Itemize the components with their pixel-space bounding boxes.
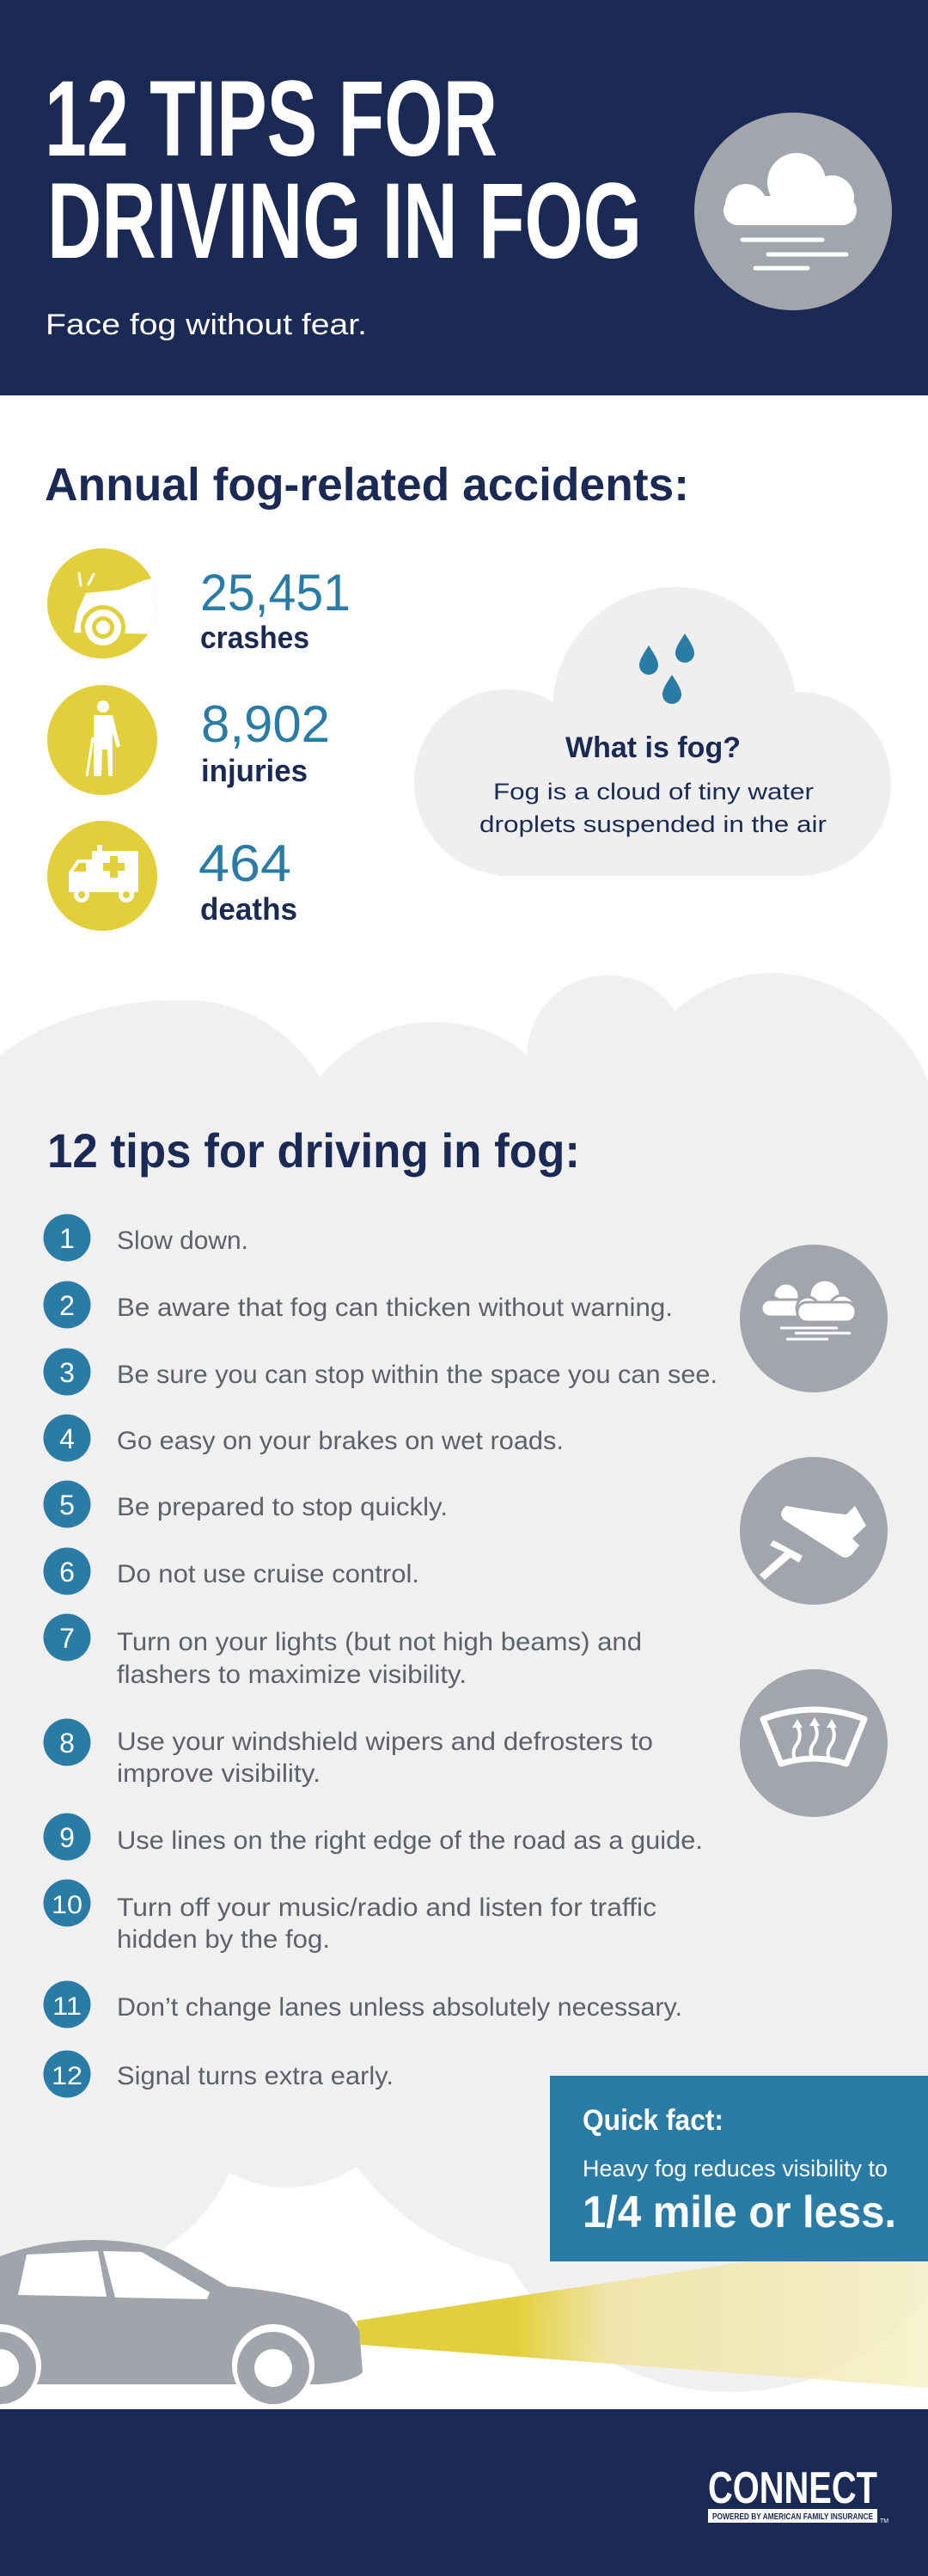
tip 10: 10	[52, 1891, 82, 1919]
stat: injuries: 8,902	[201, 695, 330, 753]
title: 12 TIPS FOR	[45, 59, 498, 179]
callout: quick fact	[550, 2076, 928, 2261]
tip 12: Signal turns extra early.	[117, 2062, 394, 2090]
tip 9: Use lines on the right edge of the road as a guide.	[117, 1826, 703, 1855]
icon: clouds and fog	[740, 1245, 888, 1392]
heading: annual accidents: Annual fog-related accidents:	[45, 459, 689, 511]
stat: deaths: 464	[198, 835, 291, 892]
logo: connect: TM	[880, 2518, 888, 2524]
tip 6: 6	[59, 1557, 75, 1588]
logo: connect: POWERED BY AMERICAN FAMILY INSURANCE	[712, 2512, 873, 2522]
stat: deaths	[47, 821, 297, 931]
tip 2: 2	[59, 1290, 75, 1321]
stat: injuries	[47, 685, 330, 795]
tip 4: 4	[59, 1423, 75, 1454]
tip 1	[43, 1214, 248, 1262]
tip 6	[43, 1547, 419, 1595]
tip 5	[43, 1480, 448, 1528]
callout: quick fact: Heavy fog reduces visibility to	[583, 2156, 888, 2181]
subtitle: Face fog without fear.	[46, 309, 367, 341]
scene: ground fog	[0, 1771, 928, 2409]
tip 10: Turn off your music/radio and listen for traffic	[117, 1894, 656, 1922]
stat: injuries: injuries	[201, 753, 308, 788]
title: DRIVING IN FOG	[47, 162, 642, 281]
tip 11: 11	[52, 1992, 82, 2021]
tip 9	[43, 1814, 703, 1860]
tips list	[43, 1214, 717, 2097]
tip 7: Turn on your lights (but not high beams) and	[117, 1628, 642, 1656]
tip 7: flashers to maximize visibility.	[117, 1661, 467, 1689]
tip 3: 3	[59, 1357, 75, 1388]
panel: what is fog cloud: droplets suspended in the air	[479, 811, 827, 837]
tip 7	[43, 1614, 642, 1689]
tip 5: Be prepared to stop quickly.	[117, 1493, 448, 1521]
tip 10: hidden by the fog.	[117, 1925, 330, 1954]
icon: ambulance	[47, 821, 157, 931]
tip 11	[43, 1980, 682, 2028]
stat: crashes: crashes	[200, 620, 309, 655]
tip 8: improve visibility.	[117, 1759, 321, 1788]
tip 3: Be sure you can stop within the space you can see.	[117, 1361, 717, 1389]
icon: water drops	[639, 633, 694, 704]
footer	[0, 2409, 928, 2576]
panel: fog background	[0, 973, 928, 2409]
icon: fog cloud	[694, 113, 892, 310]
title	[45, 59, 642, 281]
panel: what is fog cloud: Fog is a cloud of tiny water	[493, 779, 814, 805]
icon: injured person	[47, 685, 157, 795]
tip 8: Use your windshield wipers and defrosters to	[117, 1728, 653, 1756]
stat: crashes: 25,451	[200, 564, 351, 621]
tip 11: Don’t change lanes unless absolutely necessary.	[117, 1993, 682, 2022]
tip 1: 1	[59, 1223, 75, 1254]
tip 2	[43, 1281, 673, 1329]
stat: deaths: deaths	[200, 891, 297, 927]
tip 8	[43, 1719, 653, 1788]
tip 4	[43, 1415, 564, 1461]
logo: connect	[708, 2463, 888, 2524]
panel: what is fog cloud	[414, 587, 891, 876]
panel: what is fog cloud: What is fog?	[565, 731, 741, 764]
headlight beam	[357, 2234, 928, 2388]
callout: quick fact: 1/4 mile or less.	[583, 2187, 896, 2237]
tip 6: Do not use cruise control.	[117, 1560, 419, 1588]
tip 2: Be aware that fog can thicken without warning.	[117, 1294, 673, 1322]
icon: crash	[47, 548, 157, 658]
icon: windshield defroster	[740, 1669, 888, 1817]
header	[0, 0, 928, 395]
callout: quick fact: Quick fact:	[583, 2104, 723, 2137]
tip 1: Slow down.	[117, 1227, 248, 1255]
tip 12: 12	[52, 2062, 82, 2090]
icon: foot on brake pedal	[740, 1457, 888, 1605]
tip 9: 9	[59, 1822, 75, 1853]
tip 7: 7	[59, 1623, 75, 1654]
stat: crashes	[47, 548, 351, 658]
tip 4: Go easy on your brakes on wet roads.	[117, 1427, 564, 1455]
tip 10	[43, 1879, 656, 1954]
tip 12	[43, 2051, 394, 2097]
tip 8: 8	[59, 1728, 75, 1759]
logo: connect: CONNECT	[708, 2463, 877, 2513]
tip 5: 5	[59, 1490, 75, 1521]
heading: 12 tips: 12 tips for driving in fog:	[47, 1123, 580, 1178]
tip 3	[43, 1348, 717, 1396]
car	[0, 2240, 363, 2407]
